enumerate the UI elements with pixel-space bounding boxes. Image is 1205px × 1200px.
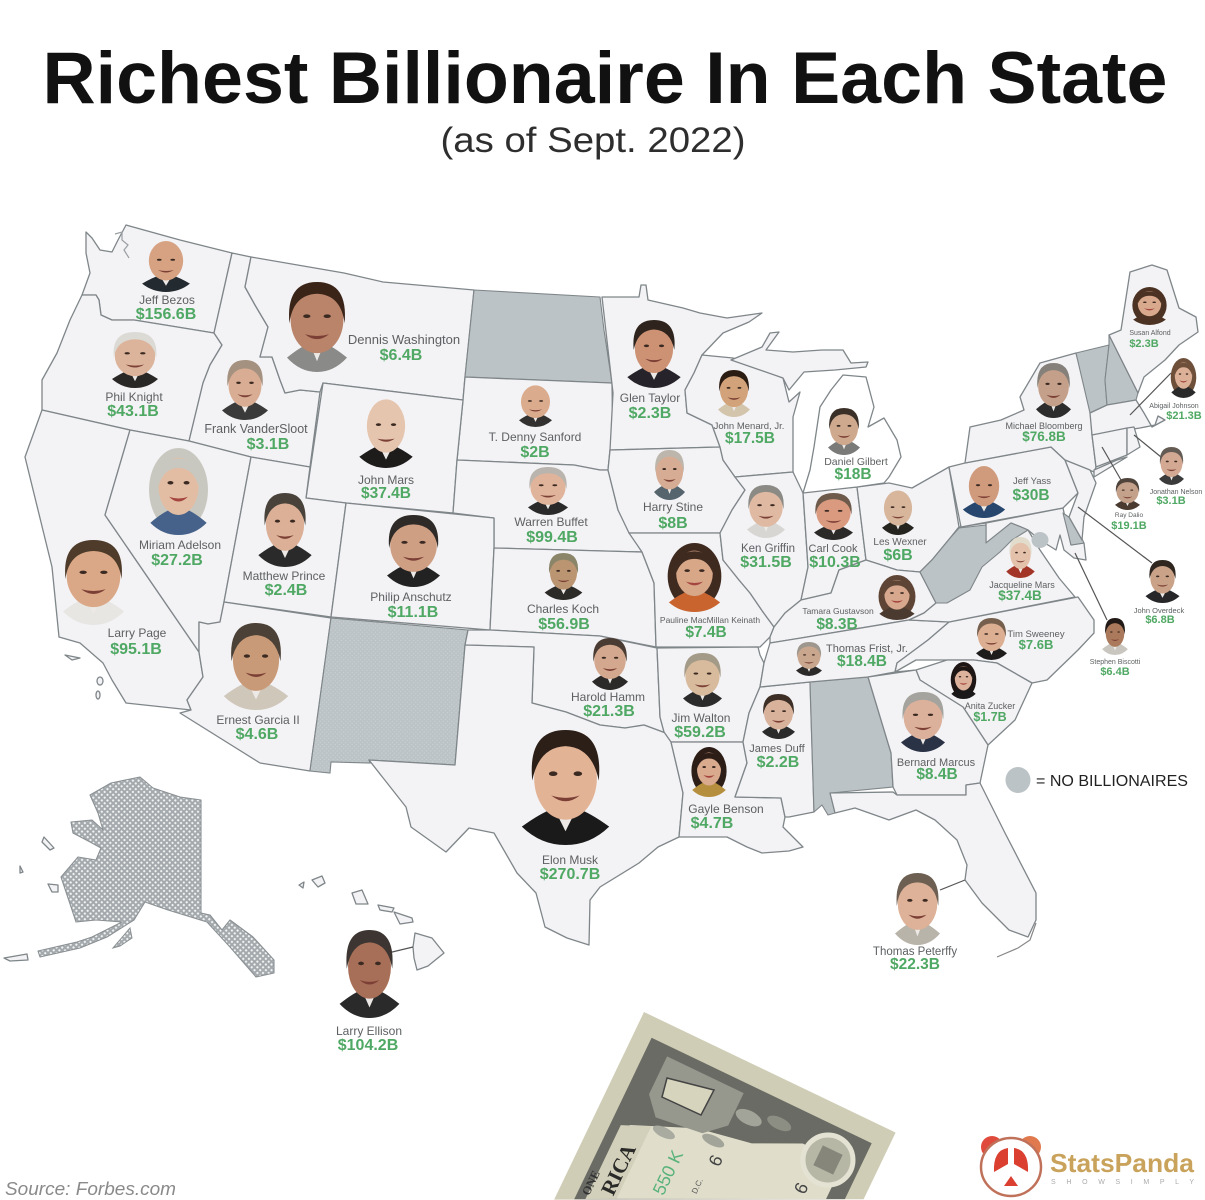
billionaire: Harold Hamm: $21.3B (583, 703, 635, 720)
portrait (1006, 537, 1035, 578)
billionaire: Jonathan Nelson: Jonathan Nelson (1150, 489, 1202, 496)
billionaire: Tim Sweeney: $7.6B (1019, 637, 1053, 652)
billionaire: Frank VanderSloot: $3.1B (247, 436, 289, 453)
logo: StatsPanda (981, 1136, 1195, 1196)
billionaire: Jim Walton: Jim Walton (672, 711, 730, 725)
dollar bill (554, 1012, 896, 1200)
logo: StatsPanda: S H O W S I M P L Y (1051, 1179, 1194, 1186)
portrait (882, 490, 914, 535)
portrait (1145, 560, 1180, 603)
billionaire: Dennis Washington: Dennis Washington (348, 332, 460, 347)
portrait (545, 553, 582, 600)
billionaire: Matthew Prince (243, 493, 326, 599)
portrait (828, 408, 860, 455)
billionaire: Thomas Frist, Jr.: $18.4B (837, 653, 887, 670)
portrait (387, 515, 440, 587)
billionaire: Dennis Washington (287, 282, 460, 372)
portrait (796, 642, 822, 676)
billionaire: Michael Bloomberg: $76.8B (1022, 429, 1066, 444)
portrait (142, 241, 190, 292)
billionaire: Larry Page: $95.1B (110, 641, 162, 658)
map: contiguous United States (25, 225, 1198, 957)
billionaire: Jacqueline Mars (989, 537, 1055, 603)
billionaire: Glen Taylor (620, 320, 681, 422)
dollar bill: RICA (596, 1139, 641, 1199)
leader lines (388, 373, 1171, 953)
portrait (1102, 618, 1128, 655)
billionaire: Charles Koch: $56.9B (538, 616, 590, 633)
billionaire: Thomas Peterffy: $22.3B (890, 956, 940, 973)
billionaire: Daniel Gilbert: $18B (834, 466, 872, 483)
billionaire: T. Denny Sanford: $2B (520, 444, 550, 461)
billionaire: Harry Stine: $8B (658, 515, 688, 532)
billionaire: Carl Cook (809, 493, 861, 571)
billionaire: Tamara Gustavson: Tamara Gustavson (802, 606, 874, 616)
portrait (340, 930, 399, 1018)
billionaire: Tamara Gustavson: $8.3B (816, 616, 858, 633)
billionaire: Jeff Bezos: $156.6B (136, 306, 196, 323)
portrait (1159, 447, 1184, 485)
billionaire: Les Wexner: $6B (883, 547, 913, 564)
billionaire: Harry Stine (643, 450, 703, 532)
portrait (654, 450, 685, 500)
portrait (691, 747, 727, 797)
dollar bill: D.C. (690, 1177, 705, 1195)
billionaire: Glen Taylor: Glen Taylor (620, 391, 680, 405)
billionaire: Daniel Gilbert (824, 408, 888, 483)
billionaire: Harold Hamm (571, 638, 645, 720)
billionaire: Jeff Bezos (136, 241, 196, 323)
billionaire: Harry Stine: Harry Stine (643, 500, 703, 514)
billionaire: Les Wexner: Les Wexner (873, 537, 927, 548)
billionaire: Ray Dalio (1111, 478, 1147, 532)
billionaire: John Menard, Jr.: $17.5B (725, 430, 775, 447)
billionaire: Gayle Benson: Gayle Benson (688, 802, 764, 816)
billionaire: Philip Anschutz: $11.1B (388, 604, 438, 621)
billionaire: Jeff Yass: Jeff Yass (1013, 476, 1051, 487)
billionaire: Miriam Adelson: Miriam Adelson (139, 538, 221, 552)
billionaire: James Duff (749, 694, 806, 771)
legend: no billionaires: = NO BILLIONAIRES (1036, 773, 1188, 790)
billionaire: John Mars: John Mars (358, 473, 414, 487)
billionaire: John Menard, Jr.: John Menard, Jr. (714, 421, 784, 432)
billionaire: Miriam Adelson: $27.2B (151, 552, 203, 569)
billionaire: Ray Dalio: $19.1B (1111, 520, 1147, 532)
portrait (895, 873, 940, 945)
billionaire: John Mars: $37.4B (361, 485, 411, 502)
subtitle: (as of Sept. 2022) (440, 121, 746, 160)
dollar bill: ONE (579, 1168, 603, 1198)
billionaire: Anita Zucker (951, 662, 1015, 724)
billionaire: Charles Koch: Charles Koch (527, 602, 599, 616)
portrait (287, 282, 347, 372)
portrait (747, 485, 785, 538)
billionaire: Pauline MacMillan Keinath: Pauline MacMillan Keinath (660, 615, 760, 625)
billionaire: Pauline MacMillan Keinath (660, 543, 760, 641)
billionaire: James Duff: James Duff (749, 743, 806, 755)
billionaire: Les Wexner (873, 490, 927, 564)
billionaire: Glen Taylor: $2.3B (629, 405, 671, 422)
billionaire: Michael Bloomberg: Michael Bloomberg (1005, 421, 1083, 431)
billionaire: Thomas Peterffy (873, 873, 957, 973)
billionaire: Ken Griffin: $31.5B (740, 554, 792, 571)
portrait (258, 493, 312, 567)
portrait (112, 332, 158, 388)
billionaire: Jeff Bezos: Jeff Bezos (139, 293, 195, 307)
billionaire: T. Denny Sanford (489, 385, 581, 461)
billionaire: Warren Buffet (514, 467, 588, 546)
portrait (519, 385, 552, 427)
billionaire: Abigail Johnson (1149, 358, 1202, 422)
portrait (63, 540, 124, 625)
billionaire: Ken Griffin (740, 485, 795, 571)
billionaire: Thomas Peterffy: Thomas Peterffy (873, 946, 957, 958)
portrait (951, 662, 976, 699)
billionaire: Thomas Frist, Jr.: Thomas Frist, Jr. (826, 643, 908, 655)
billionaire: Larry Ellison (336, 930, 402, 1054)
billionaire: Susan Alfond: Susan Alfond (1129, 330, 1171, 337)
billionaire: John Overdeck: $6.8B (1145, 614, 1175, 626)
billionaire: Stephen Biscotti: Stephen Biscotti (1090, 659, 1141, 666)
billionaire: Thomas Frist, Jr. (796, 642, 908, 676)
billionaire: Warren Buffet: Warren Buffet (514, 515, 588, 529)
portrait (963, 466, 1005, 518)
billionaire: Susan Alfond: $2.3B (1129, 338, 1159, 350)
billionaire: Larry Page (63, 540, 167, 658)
billionaire: Bernard Marcus: $8.4B (916, 766, 958, 783)
billionaire: Miriam Adelson (139, 448, 221, 569)
billionaire: Tim Sweeney: Tim Sweeney (1007, 629, 1065, 640)
portrait (522, 730, 609, 845)
portrait (359, 399, 413, 468)
billionaire: Gayle Benson (688, 747, 764, 832)
portrait (592, 638, 628, 690)
billionaire: Gayle Benson: $4.7B (691, 815, 733, 832)
billionaire: Abigail Johnson: Abigail Johnson (1149, 403, 1199, 410)
billionaire: Jeff Yass: $30B (1012, 487, 1050, 504)
billionaire: John Overdeck: John Overdeck (1134, 606, 1184, 615)
billionaire: Frank VanderSloot: Frank VanderSloot (204, 422, 308, 436)
billionaire: T. Denny Sanford: T. Denny Sanford (489, 430, 581, 444)
portrait (1036, 363, 1071, 418)
billionaire: Jonathan Nelson: $3.1B (1156, 495, 1186, 507)
logo: StatsPanda: StatsPanda (1050, 1148, 1195, 1178)
portrait (668, 543, 721, 612)
billionaire: Bernard Marcus: Bernard Marcus (897, 757, 976, 769)
panda icon (981, 1136, 1041, 1196)
billionaire: Carl Cook: Carl Cook (809, 543, 858, 555)
billionaire: Jeff Yass (963, 466, 1051, 518)
billionaire: Jim Walton: $59.2B (674, 724, 726, 741)
billionaire: Michael Bloomberg (1005, 363, 1083, 444)
map: California islands (65, 655, 103, 699)
billionaire: Larry Ellison: Larry Ellison (336, 1024, 402, 1038)
dollar bill: 6 (790, 1179, 812, 1197)
billionaire: Susan Alfond (1129, 287, 1171, 350)
billionaire: Ray Dalio: Ray Dalio (1115, 512, 1143, 519)
portrait (1115, 478, 1140, 510)
portrait (1171, 358, 1196, 398)
portrait (683, 653, 722, 707)
billionaire: Harold Hamm: Harold Hamm (571, 690, 645, 704)
billionaire: Tim Sweeney (976, 618, 1065, 660)
billionaire: Stephen Biscotti (1090, 618, 1141, 678)
billionaire: Phil Knight (105, 332, 163, 420)
map: Alaska (4, 777, 274, 977)
billionaire: Stephen Biscotti: $6.4B (1100, 666, 1130, 678)
billionaire: Phil Knight: $43.1B (107, 403, 159, 420)
billionaire: Jonathan Nelson (1150, 447, 1202, 507)
billionaire: Carl Cook: $10.3B (809, 554, 861, 571)
billionaire: Charles Koch (527, 553, 599, 633)
billionaire: Elon Musk: $270.7B (540, 866, 600, 883)
billionaire: Larry Ellison: $104.2B (338, 1037, 398, 1054)
billionaire: Philip Anschutz: Philip Anschutz (370, 590, 452, 604)
billionaire: Warren Buffet: $99.4B (526, 529, 578, 546)
billionaire: Ernest Garcia II (216, 623, 300, 743)
portrait (528, 467, 568, 515)
billionaire: Ernest Garcia II: Ernest Garcia II (216, 713, 300, 727)
billionaire: Philip Anschutz (370, 515, 452, 621)
portrait (1132, 287, 1167, 325)
billionaire: John Menard, Jr. (714, 370, 784, 447)
dollar bill: 550 K (649, 1147, 687, 1198)
billionaire: Anita Zucker: Anita Zucker (965, 701, 1015, 711)
billionaire: Matthew Prince: $2.4B (265, 582, 307, 599)
billionaire: John Overdeck (1134, 560, 1184, 626)
billionaire: Ken Griffin: Ken Griffin (741, 543, 795, 555)
billionaire: Jacqueline Mars: Jacqueline Mars (989, 580, 1055, 590)
portrait (224, 623, 288, 710)
billionaire: Phil Knight: Phil Knight (105, 390, 163, 404)
legend: no billionaires (1006, 767, 1188, 793)
billionaire: Elon Musk (522, 730, 609, 883)
portrait (718, 370, 750, 417)
billionaire: Dennis Washington: $6.4B (380, 347, 422, 364)
source: Source: Forbes.com (5, 1179, 176, 1199)
billionaire: Bernard Marcus (897, 692, 976, 783)
billionaire: Daniel Gilbert: Daniel Gilbert (824, 456, 888, 468)
title: Richest Billionaire In Each State (42, 38, 1168, 119)
billionaire: Frank VanderSloot (204, 360, 308, 453)
billionaire: James Duff: $2.2B (757, 754, 799, 771)
portrait (627, 320, 681, 388)
billionaire: Jacqueline Mars: $37.4B (998, 588, 1042, 603)
portrait (762, 694, 795, 739)
billionaire: Pauline MacMillan Keinath: $7.4B (685, 624, 727, 641)
portrait (901, 692, 945, 752)
billionaire: Larry Page: Larry Page (108, 626, 167, 640)
billionaire: Jim Walton (672, 653, 730, 741)
billionaire: Ernest Garcia II: $4.6B (236, 726, 278, 743)
billionaire: Matthew Prince: Matthew Prince (243, 569, 326, 583)
dollar bill: 6 (705, 1152, 727, 1169)
billionaire: Tamara Gustavson (802, 575, 915, 633)
billionaire: Elon Musk: Elon Musk (542, 853, 599, 867)
billionaire: John Mars (358, 399, 414, 502)
billionaire: Anita Zucker: $1.7B (973, 710, 1007, 724)
portrait (976, 618, 1007, 660)
portrait (149, 448, 208, 535)
portrait (814, 493, 853, 540)
billionaire: Abigail Johnson: $21.3B (1166, 410, 1202, 422)
portrait (222, 360, 268, 420)
map: Hawaii (299, 876, 444, 970)
portrait (879, 575, 915, 620)
